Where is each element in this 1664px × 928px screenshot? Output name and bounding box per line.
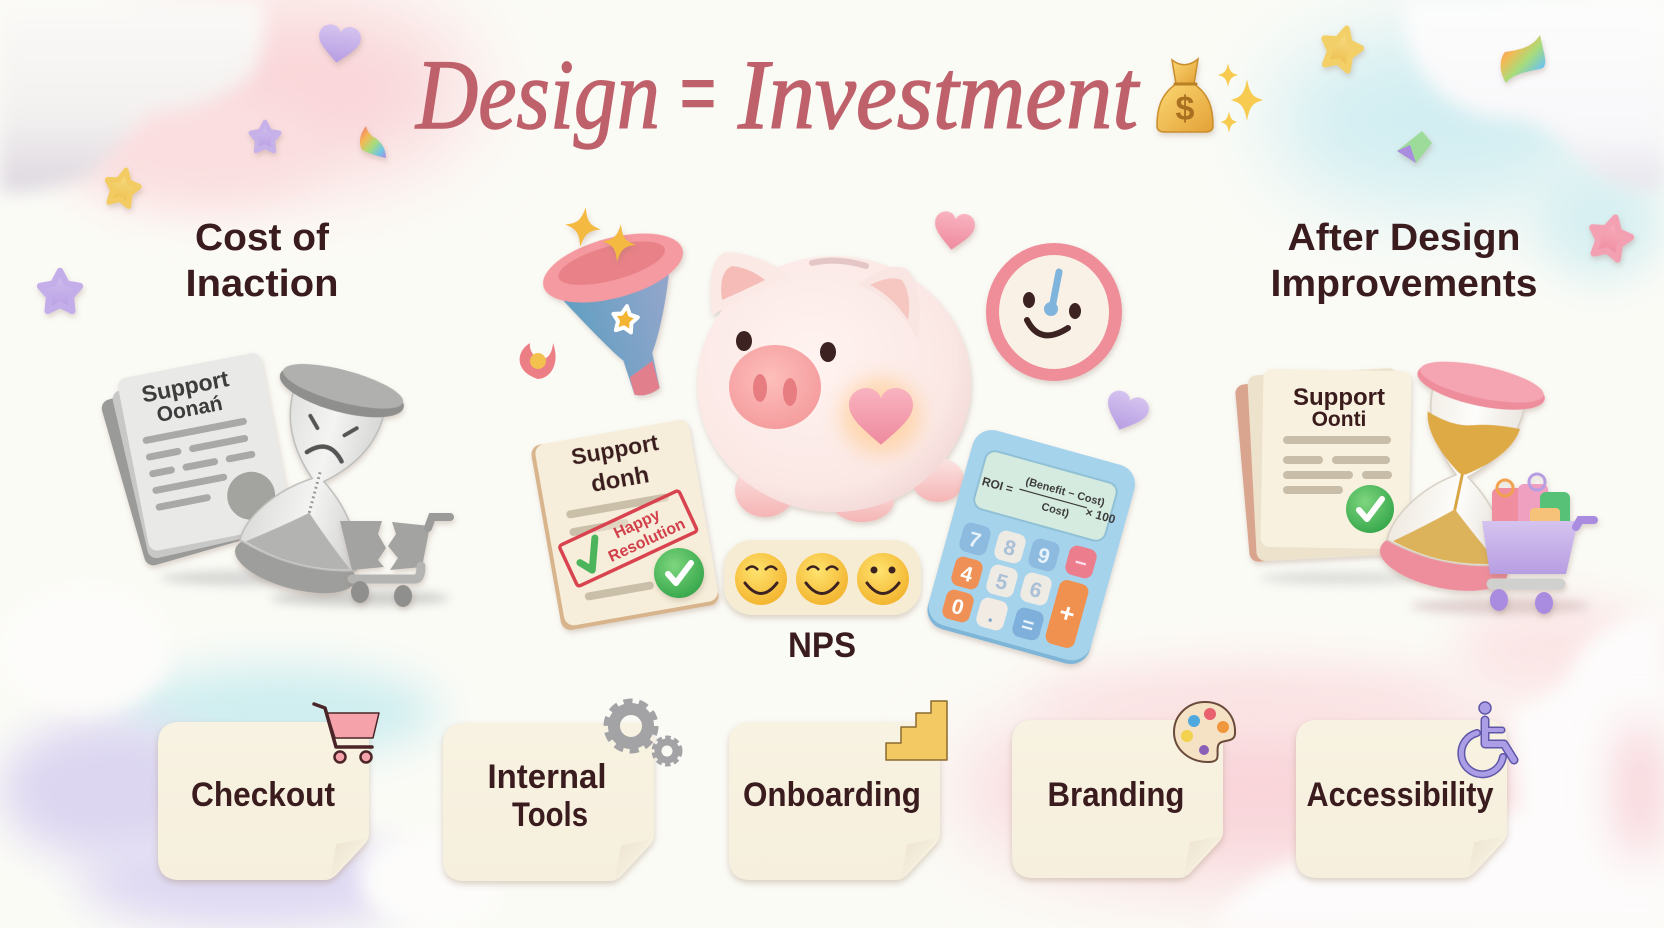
calculator keys bbox=[941, 521, 1098, 650]
icon: palette bbox=[1174, 702, 1235, 762]
icon: stairs bbox=[886, 701, 947, 760]
illustration: piggy bank bbox=[697, 252, 971, 522]
calculator keys: 7 bbox=[966, 528, 983, 553]
heading: after design improvements: Improvements bbox=[1270, 263, 1538, 305]
title: = bbox=[680, 48, 716, 137]
heading: cost of inaction: Inaction bbox=[186, 263, 338, 305]
smiley 2 bbox=[796, 553, 848, 605]
decorative confetti: stars, hearts, ribbons bbox=[40, 23, 1635, 437]
heading: after design improvements bbox=[1270, 217, 1538, 305]
card: onboarding bbox=[729, 701, 947, 880]
broken cart bbox=[340, 517, 450, 607]
illustration: ROI calculator bbox=[923, 425, 1140, 669]
calculator keys: = bbox=[1019, 613, 1037, 638]
illustration: support document with happy resolution stamp: donh bbox=[589, 461, 651, 498]
small red swirl bbox=[520, 343, 556, 379]
calculator keys: 5 bbox=[993, 570, 1011, 595]
card: checkout: Checkout bbox=[191, 776, 335, 814]
grey support document stack bbox=[100, 351, 293, 567]
illustration: support document with happy resolution stamp: Happy bbox=[611, 506, 663, 542]
ROI formula: ROI = bbox=[980, 474, 1015, 496]
icon: gears bbox=[606, 702, 680, 764]
ROI formula: (Benefit − Cost) bbox=[1024, 476, 1106, 509]
golden hourglass bbox=[1375, 353, 1549, 601]
title bbox=[414, 39, 1140, 150]
illustration: central funnel bbox=[520, 205, 716, 413]
icon: money bag: $ bbox=[1176, 90, 1195, 128]
grey hourglass with sad face bbox=[227, 354, 409, 605]
ROI formula: × 100 bbox=[1084, 505, 1117, 527]
card: branding: Branding bbox=[1048, 776, 1184, 814]
title: Design bbox=[414, 39, 660, 150]
card: onboarding: Onboarding bbox=[743, 776, 921, 814]
heading: after design improvements: After Design bbox=[1288, 217, 1520, 259]
calculator keys: 9 bbox=[1035, 544, 1052, 569]
card: internal tools: Tools bbox=[512, 796, 588, 834]
purple shopping cart with goods bbox=[1482, 474, 1594, 614]
icon: wheelchair bbox=[1461, 702, 1514, 774]
icon: sparkles bbox=[1218, 63, 1263, 133]
NPS smiley bar bbox=[724, 540, 921, 615]
cream support document stack: Support bbox=[1293, 384, 1385, 411]
card: internal tools: Internal bbox=[488, 758, 606, 796]
card: branding bbox=[1012, 702, 1235, 878]
calculator keys: 6 bbox=[1027, 578, 1044, 603]
title: Investment bbox=[737, 39, 1140, 150]
illustration: support document with happy resolution stamp: Resolution bbox=[606, 516, 688, 566]
calculator keys: 4 bbox=[958, 562, 976, 587]
cream support document stack bbox=[1235, 368, 1412, 562]
ROI formula: Cost) bbox=[1040, 501, 1071, 520]
card: internal tools bbox=[443, 702, 680, 881]
grey support document stack: Oonań bbox=[155, 392, 224, 427]
card: accessibility bbox=[1296, 702, 1514, 878]
calculator keys: 8 bbox=[1001, 536, 1019, 561]
illustration: support document with happy resolution stamp: Support bbox=[569, 429, 661, 470]
smiley 3 bbox=[857, 553, 909, 605]
icon: pink cart bbox=[314, 704, 379, 762]
illustration: cost of inaction bbox=[100, 351, 450, 607]
icon: smiling clock bbox=[986, 243, 1122, 381]
NPS label: NPS bbox=[788, 626, 856, 665]
illustration: after design improvements bbox=[1235, 353, 1594, 614]
calculator keys: + bbox=[1056, 597, 1079, 630]
grey support document stack: Support bbox=[139, 365, 231, 408]
calculator keys: 0 bbox=[949, 595, 966, 620]
smiley 1 bbox=[735, 553, 787, 605]
heading: cost of inaction: Cost of bbox=[195, 217, 329, 259]
illustration: support document with happy resolution stamp bbox=[530, 419, 720, 631]
ROI formula bbox=[978, 465, 1121, 532]
calculator keys: . bbox=[986, 604, 997, 627]
calculator keys: − bbox=[1072, 551, 1090, 576]
cream support document stack: Oonti bbox=[1312, 408, 1366, 431]
icon: money bag bbox=[1157, 59, 1213, 132]
heading: cost of inaction bbox=[186, 217, 338, 305]
card: accessibility: Accessibility bbox=[1306, 776, 1494, 814]
card: checkout bbox=[158, 704, 379, 880]
